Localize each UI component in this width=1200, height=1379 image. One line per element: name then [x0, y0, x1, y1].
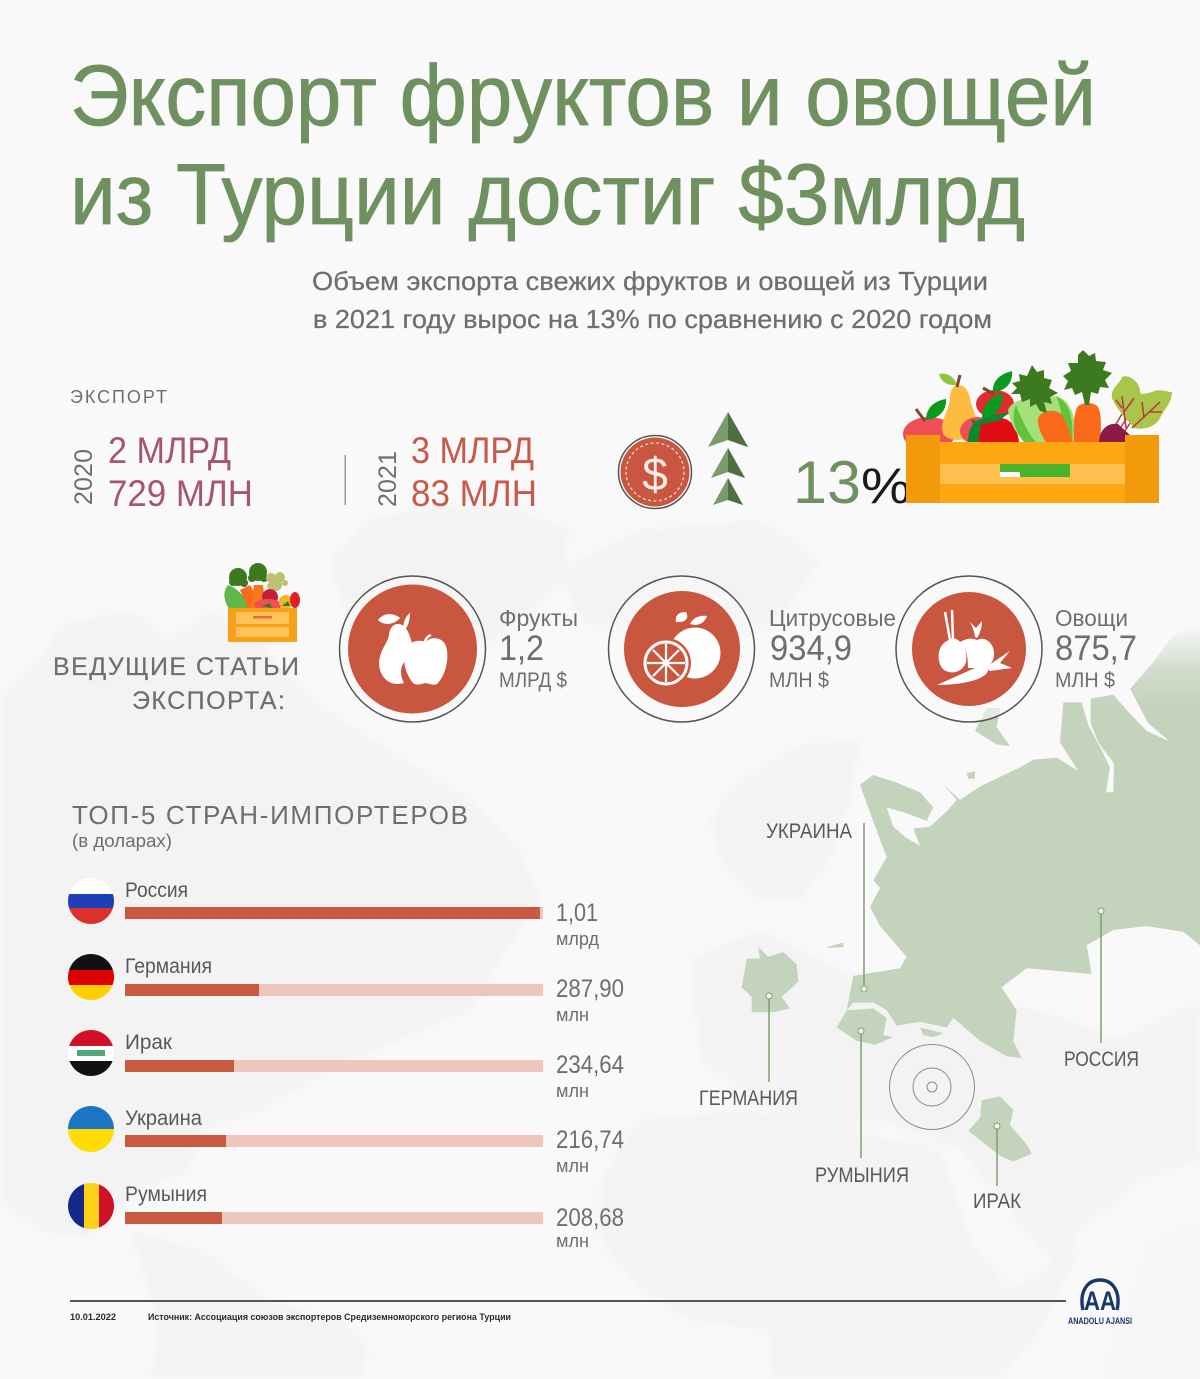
heading: top 5 importers: ТОП-5 СТРАН-ИМПОРТЕРОВ: [72, 800, 468, 830]
label: citrus: Цитрусовые: [769, 605, 896, 631]
bar row: Germany: Германия: [125, 955, 212, 978]
logo: Anadolu Ajansi: [1068, 1280, 1132, 1327]
flag: Ukraine: [68, 1106, 114, 1152]
heading: leading export items: ЭКСПОРТА:: [132, 687, 285, 715]
title: [70, 48, 1096, 243]
bar row: Germany: млн: [556, 1005, 589, 1025]
icon: small vegetable crate: [224, 563, 300, 642]
bar row: Germany: 287,90: [556, 975, 624, 1003]
bar row: Russia: млрд: [556, 929, 599, 949]
bar row: Russia: 1,01: [556, 899, 598, 927]
bar row: Germany: [125, 955, 624, 1025]
background world map: [0, 505, 1200, 1379]
export 2021: 2021: [374, 451, 402, 507]
map highlight: Iraq: [968, 1096, 1032, 1161]
title: из Турции достиг $3млрд: [70, 147, 1025, 243]
chard: [1112, 376, 1172, 429]
map label: Germany: [699, 993, 798, 1110]
heading: top 5 importers: (в доларах): [72, 831, 172, 851]
bar row: Iraq: 234,64: [556, 1051, 624, 1079]
icon: growth arrows: [708, 412, 748, 505]
flag: Russia: [68, 878, 114, 924]
heading: leading export items: ВЕДУЩИЕ СТАТЬИ: [53, 653, 299, 681]
heading: leading export items: [53, 653, 299, 715]
title: Экспорт фруктов и овощей: [70, 48, 1096, 144]
bar row: Russia: Россия: [125, 879, 188, 902]
footer: date and source: 10.01.2022: [70, 1312, 116, 1323]
icon: fruits: [340, 576, 486, 722]
growth percent: 13: [793, 449, 861, 516]
map highlight: Germany: [742, 947, 798, 1012]
label: vegetables: Овощи: [1055, 605, 1128, 631]
export 2020: 2020: [70, 449, 98, 505]
map label: Russia: РОССИЯ: [1064, 1048, 1139, 1071]
flag: Iraq: [68, 1030, 114, 1077]
crate body: [906, 442, 1159, 503]
bar row: Iraq: [125, 1031, 624, 1101]
growth percent: [793, 449, 911, 516]
icon: vegetables: [896, 576, 1042, 722]
bar row: Romania: 208,68: [556, 1204, 624, 1232]
map marker: Turkey target: [890, 1044, 974, 1130]
subtitle: Объем экспорта свежих фруктов и овощей из Турции: [312, 266, 988, 296]
export 2021: 3 МЛРД: [411, 430, 534, 471]
map label: Russia: [1064, 908, 1139, 1071]
map label: Ukraine: [766, 820, 867, 992]
footer: date and source: Источник: Ассоциация союзов экспортеров Средиземноморского региона Турции: [148, 1312, 511, 1323]
label: fruits: 1,2: [499, 629, 544, 668]
logo: Anadolu Ajansi: AA: [1084, 1286, 1116, 1316]
map label: Germany: ГЕРМАНИЯ: [699, 1087, 798, 1110]
bar row: Russia: [125, 879, 599, 949]
heading: top 5 importers: [72, 800, 468, 851]
map label: Ukraine: УКРАИНА: [766, 820, 852, 843]
label: fruits: Фрукты: [499, 605, 578, 631]
export heading: ЭКСПОРТ: [70, 387, 167, 407]
label: fruits: [499, 605, 578, 692]
icon: large vegetable crate: [903, 350, 1172, 503]
bar row: Ukraine: млн: [556, 1156, 589, 1176]
bar row: Romania: Румыния: [125, 1183, 207, 1206]
icon: dollar coin: $: [642, 448, 668, 500]
label: fruits: МЛРД $: [499, 669, 567, 692]
label: vegetables: [1055, 605, 1137, 692]
bar row: Ukraine: Украина: [125, 1107, 202, 1130]
bar row: Iraq: млн: [556, 1081, 589, 1101]
label: citrus: [769, 605, 896, 692]
label: citrus: 934,9: [770, 629, 852, 668]
bar row: Romania: млн: [556, 1231, 589, 1251]
map label: Iraq: ИРАК: [973, 1190, 1022, 1213]
label: vegetables: 875,7: [1055, 629, 1137, 668]
bar row: Romania: [125, 1183, 624, 1251]
carrot tops: [1011, 365, 1058, 413]
flag: Romania: [68, 1183, 115, 1229]
map label: Iraq: [973, 1123, 1022, 1213]
bar row: Ukraine: 216,74: [556, 1126, 624, 1154]
map highlight: Romania: [837, 1008, 893, 1045]
export 2020: 729 МЛН: [108, 473, 253, 514]
export 2020: [70, 430, 253, 514]
subtitle: [312, 266, 992, 334]
label: citrus: МЛН $: [769, 669, 829, 692]
bar row: Ukraine: [125, 1107, 624, 1176]
bar row: Iraq: Ирак: [125, 1031, 173, 1054]
map highlight: Russia: [827, 624, 1200, 1058]
export 2020: 2 МЛРД: [108, 430, 231, 471]
export 2021: 83 МЛН: [411, 473, 537, 514]
map label: Romania: [815, 1028, 909, 1187]
map label: Romania: РУМЫНИЯ: [815, 1164, 909, 1187]
growth percent: %: [861, 458, 911, 514]
label: vegetables: МЛН $: [1055, 669, 1115, 692]
flag: Germany: [68, 954, 114, 1000]
subtitle: в 2021 году вырос на 13% по сравнению с 2020 годом: [313, 304, 992, 334]
icon: dollar coin: [618, 436, 692, 508]
icon: citrus: [608, 576, 754, 722]
logo: Anadolu Ajansi: ANADOLU AJANSI: [1068, 1316, 1132, 1327]
export 2021: [374, 430, 537, 514]
